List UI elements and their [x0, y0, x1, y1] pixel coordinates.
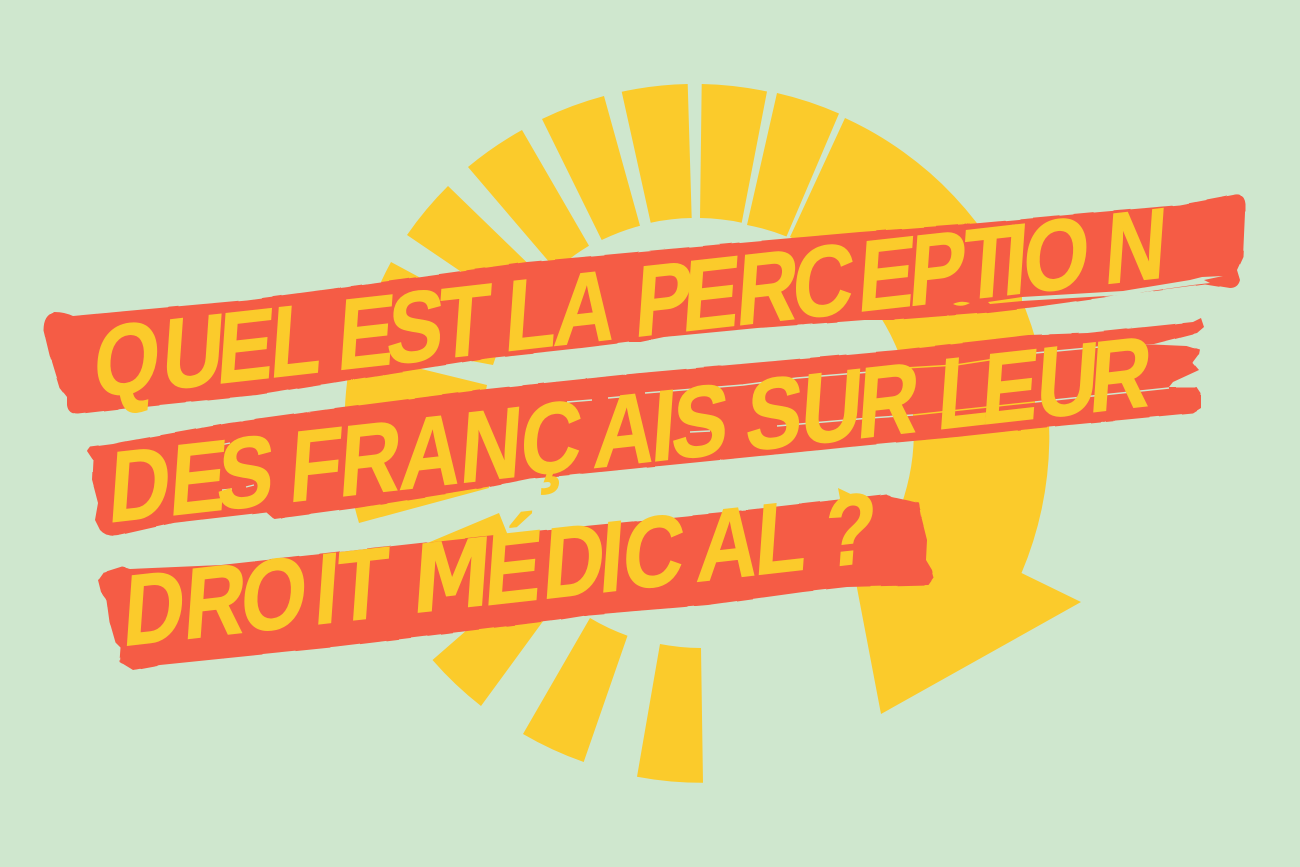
title text: [91, 185, 1171, 669]
title banners: [44, 194, 1245, 670]
segment: upper left 1: [542, 96, 640, 240]
segment: bottom 1: [523, 618, 628, 762]
banner: line 2: [87, 318, 1204, 536]
segment: upper left 3: [407, 186, 545, 311]
banner 1 torn streak over arc: [953, 297, 1022, 306]
segment: top right narrow: [747, 93, 839, 236]
arrow: large arc with arrow head: [790, 118, 1081, 714]
banner 1 torn streak: [1022, 276, 1223, 301]
segment: lower left 2: [432, 575, 560, 706]
segment: lower left 1: [375, 513, 525, 630]
banner: line 3: [98, 494, 934, 670]
title line 3: DROIT MÉDICAL ?: [120, 470, 880, 669]
banner 2 torn streak upper over arc: [905, 353, 1035, 368]
segment: top left of centre: [622, 84, 692, 223]
banner: line 1: [44, 194, 1245, 414]
banner 2 torn streak lower over arc: [913, 402, 1035, 415]
segment: left 1: [360, 262, 510, 365]
banner 2 torn streak lower: [690, 415, 913, 432]
segment: left wedge: [345, 352, 489, 523]
banner 2 torn streak upper right: [1035, 343, 1142, 353]
segment: bottom 2: [637, 644, 703, 783]
banner 2 torn bits left: [118, 443, 254, 490]
segment: top right of centre: [700, 84, 767, 223]
banner 2 torn streak upper: [567, 368, 905, 402]
title line 1: QUEL EST LA PERCEPTION: [91, 185, 1171, 419]
title line 2: DES FRANÇAIS SUR LEUR: [106, 314, 1155, 544]
segment: upper left 2: [468, 130, 589, 270]
banner 2 torn streak lower right: [1035, 388, 1169, 402]
circular arrow made of yellow segments: [345, 84, 1081, 783]
